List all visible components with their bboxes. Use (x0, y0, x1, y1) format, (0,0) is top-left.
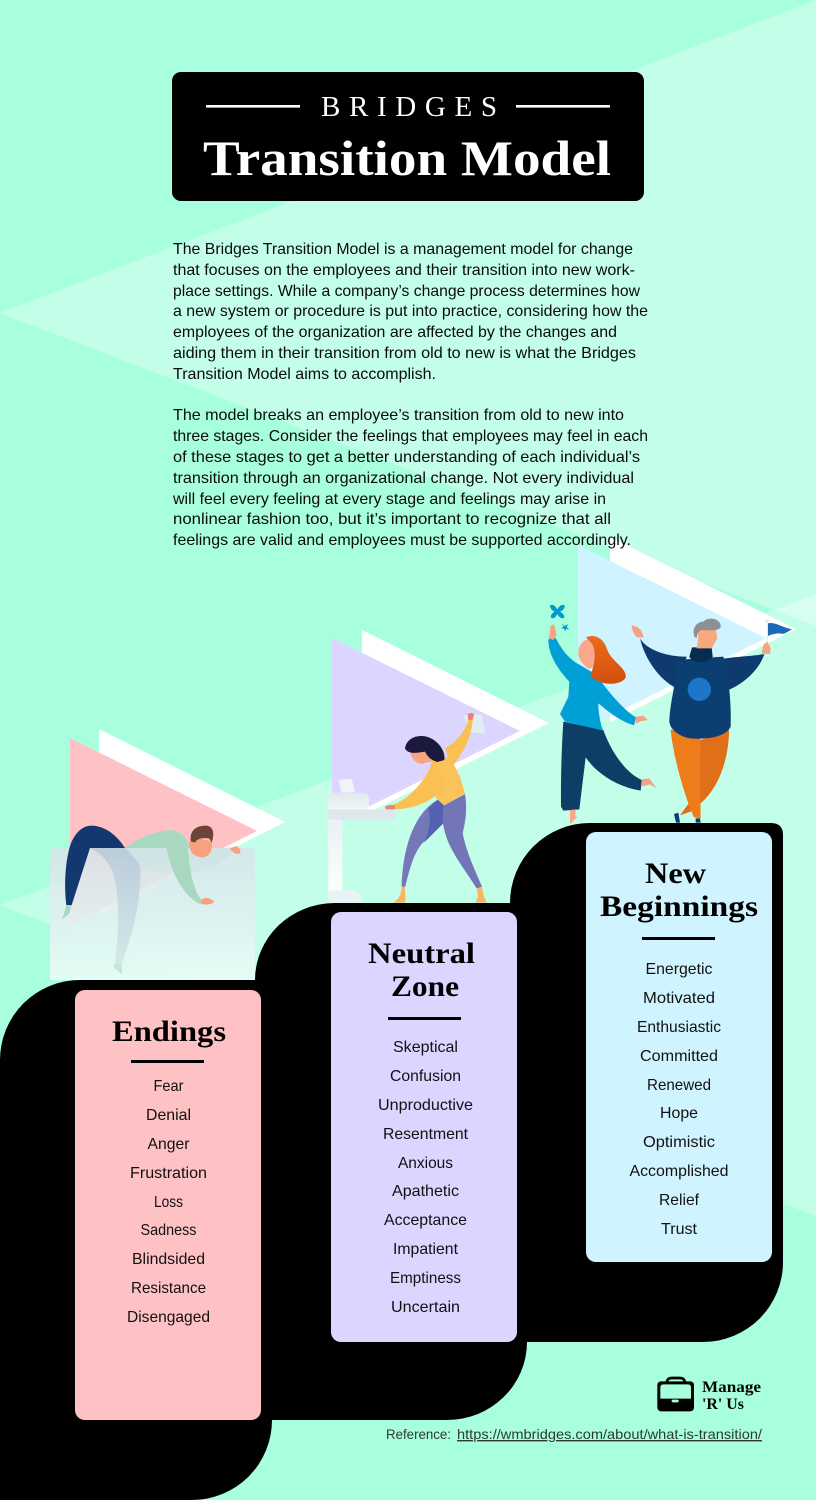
intro text block: a new system or procedure is put into practice, considering how the (173, 303, 648, 320)
intro text block: Transition Model aims to accomplish. (173, 366, 436, 383)
stepped black stairs (0, 823, 783, 1500)
list: new beginnings feelings: Enthusiastic (637, 1019, 721, 1036)
list: new beginnings feelings: Renewed (647, 1077, 711, 1094)
intro text block: employees of the organization are affected by the changes and (173, 324, 617, 341)
list: neutral zone feelings: Anxious (398, 1155, 453, 1172)
stages text block: feelings are valid and employees must be supported accordingly. (173, 532, 631, 549)
triangle: endings (70, 729, 285, 925)
list: new beginnings feelings (630, 961, 728, 1238)
heading: new beginnings: Beginnings (600, 890, 758, 923)
list: endings feelings: Frustration (130, 1165, 207, 1182)
logo: manage r us: 'R' Us (702, 1396, 744, 1413)
list: new beginnings feelings: Relief (659, 1192, 700, 1209)
list: endings feelings: Loss (154, 1194, 183, 1211)
list: new beginnings feelings: Optimistic (643, 1134, 715, 1151)
list: endings feelings: Disengaged (127, 1309, 210, 1326)
heading: neutral zone: Zone (391, 970, 459, 1003)
reference line: Reference: (386, 1426, 451, 1442)
illustration: celebrating woman (548, 605, 657, 824)
title banner (172, 72, 644, 201)
list: neutral zone feelings: Uncertain (391, 1299, 460, 1316)
logo: manage r us: Manage (702, 1379, 761, 1396)
panel: neutral zone (331, 912, 517, 1342)
stages text block: The model breaks an employee’s transition from old to new into (173, 407, 624, 424)
heading: new beginnings: New (645, 857, 706, 890)
list: neutral zone feelings: Skeptical (393, 1039, 458, 1056)
list: new beginnings feelings: Motivated (643, 990, 715, 1007)
stages text block: of these stages to get a better understanding of each individual’s (173, 449, 640, 466)
list: endings feelings: Fear (154, 1078, 184, 1095)
intro text block: The Bridges Transition Model is a management model for change (173, 241, 633, 258)
list: endings feelings: Sadness (140, 1222, 197, 1239)
list: neutral zone feelings: Emptiness (390, 1270, 461, 1287)
illustration: celebrating man with flag (632, 619, 792, 823)
triangle: new beginnings (578, 537, 796, 732)
stages text block: nonlinear fashion too, but it’s important to recognize that all (173, 511, 611, 528)
intro text block: aiding them in their transition from old to new is what the Bridges (173, 345, 636, 362)
stages text block: will feel every feeling at every stage and feelings may arise in (172, 491, 606, 508)
list: new beginnings feelings: Hope (660, 1105, 698, 1122)
list: new beginnings feelings: Trust (661, 1221, 698, 1238)
title: transition model: Transition Model (203, 130, 611, 186)
list: neutral zone feelings: Apathetic (392, 1183, 459, 1200)
list: neutral zone feelings (378, 1039, 473, 1316)
list: neutral zone feelings: Unproductive (378, 1097, 473, 1114)
icon: flag (768, 623, 792, 636)
list: neutral zone feelings: Acceptance (384, 1212, 467, 1229)
icon: briefcase (657, 1378, 694, 1411)
list: endings feelings (127, 1078, 210, 1326)
stages text block: transition through an organizational change. Not every individual (173, 470, 634, 487)
list: neutral zone feelings: Resentment (383, 1126, 469, 1143)
list: new beginnings feelings: Accomplished (630, 1163, 728, 1180)
intro text block: that focuses on the employees and their transition into new work- (173, 262, 635, 279)
panel: endings (75, 990, 261, 1420)
list: neutral zone feelings: Confusion (390, 1068, 461, 1085)
title: bridges: BRIDGES (321, 91, 497, 123)
illustration: man slumped over glass box (50, 826, 255, 980)
intro text block: place settings. While a company’s change process determines how (173, 283, 641, 300)
heading: new beginnings (600, 857, 758, 923)
heading: neutral zone (368, 937, 475, 1003)
list: endings feelings: Blindsided (132, 1251, 205, 1268)
triangle: neutral zone (332, 630, 549, 825)
icon: pinwheel sparkle (550, 605, 570, 632)
list: neutral zone feelings: Impatient (393, 1241, 459, 1258)
stages text block: three stages. Consider the feelings that employees may feel in each (173, 428, 648, 445)
panel: new beginnings (586, 832, 772, 1262)
heading: endings: Endings (112, 1015, 226, 1048)
heading: neutral zone: Neutral (368, 937, 475, 970)
reference line: https://wmbridges.com/about/what-is-transition/ (457, 1426, 762, 1442)
list: endings feelings: Anger (148, 1136, 190, 1153)
glass box (50, 848, 255, 980)
list: endings feelings: Resistance (131, 1280, 206, 1297)
illustration: woman at printer (328, 713, 487, 903)
intro text block (173, 241, 648, 383)
list: new beginnings feelings: Energetic (646, 961, 713, 978)
logo: manage r us (657, 1378, 761, 1413)
icon: chest circle (688, 678, 711, 701)
list: new beginnings feelings: Committed (640, 1048, 718, 1065)
stages text block (172, 407, 648, 549)
list: endings feelings: Denial (146, 1107, 191, 1124)
